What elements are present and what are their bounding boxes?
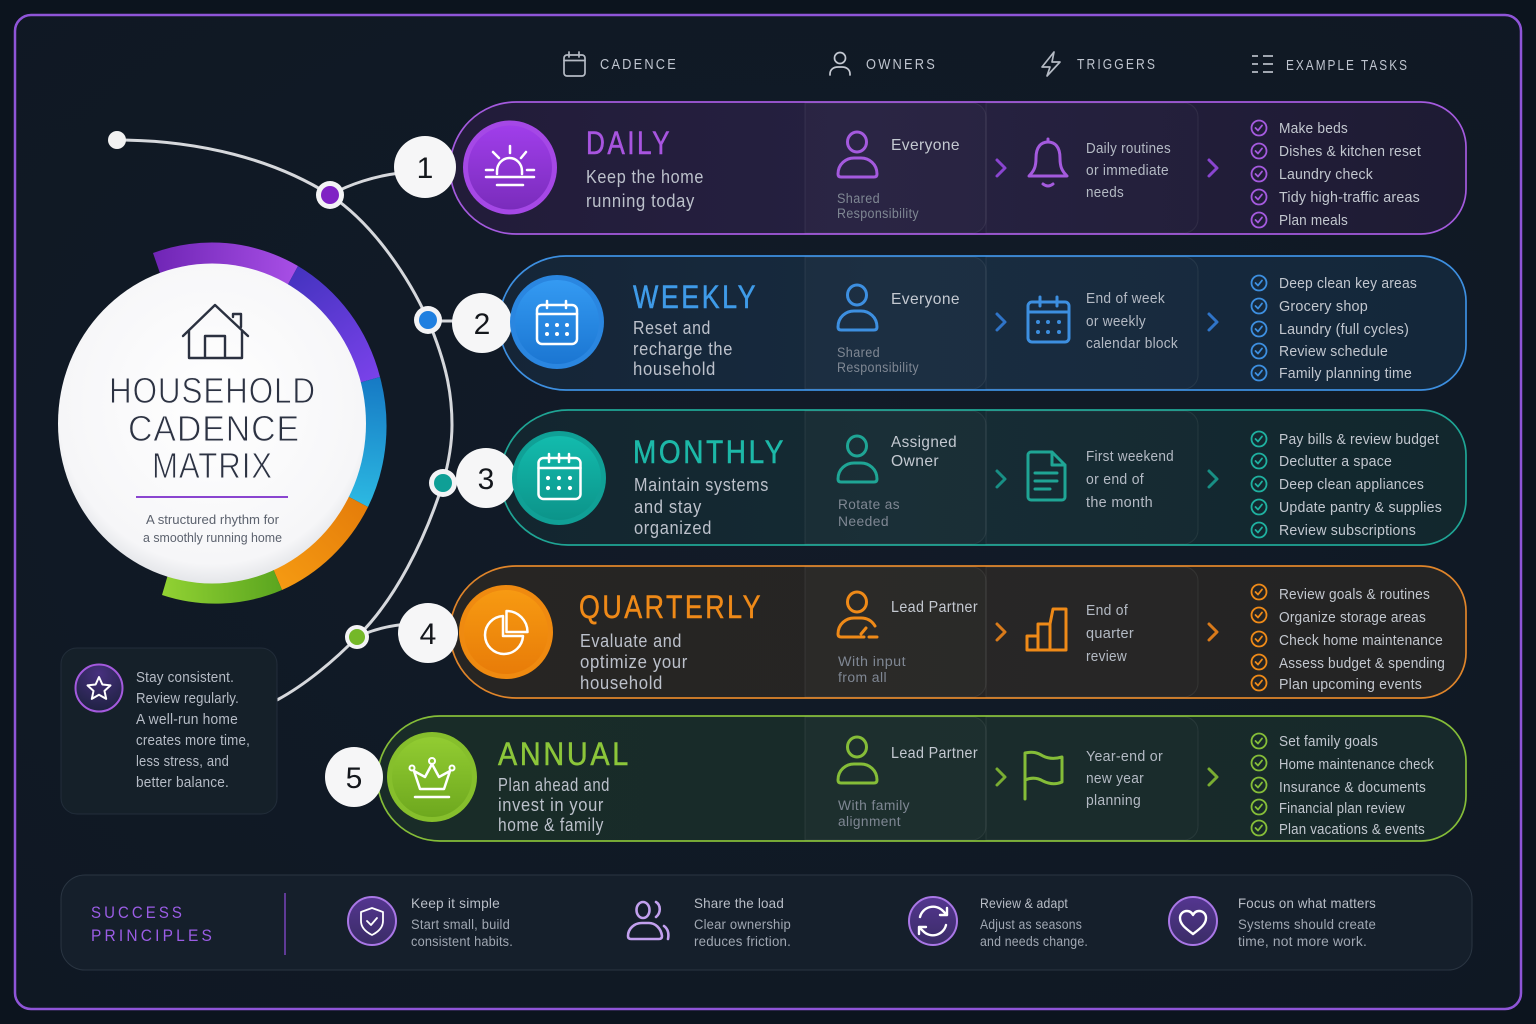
- owner: Needed: [838, 514, 889, 529]
- trigger: flag: planning: [1086, 793, 1141, 809]
- example tasks: Dishes & kitchen reset: [1279, 144, 1421, 160]
- description: [633, 318, 733, 379]
- header: cadence: CADENCE: [600, 57, 678, 73]
- title: ANNUAL: [498, 736, 631, 772]
- number badge 3: 3: [478, 463, 494, 496]
- example tasks: Insurance & documents: [1279, 780, 1426, 796]
- description: running today: [586, 191, 695, 211]
- title: WEEKLY: [633, 279, 758, 315]
- principle: share the load: [628, 895, 791, 949]
- timeline curve with nodes: [108, 131, 465, 700]
- example tasks: Laundry (full cycles): [1279, 322, 1409, 338]
- example tasks: Review subscriptions: [1279, 523, 1416, 539]
- principle: keep it simple: consistent habits.: [411, 934, 513, 949]
- example tasks: Deep clean appliances: [1279, 477, 1424, 493]
- trigger: bar chart: quarter: [1086, 626, 1134, 642]
- owner: Owner: [891, 453, 939, 470]
- trigger: flag: [1025, 749, 1163, 809]
- principle: focus on what matters: time, not more work.: [1238, 934, 1367, 949]
- principle: focus on what matters: Systems should create: [1238, 917, 1376, 932]
- owner: Everyone: [891, 291, 960, 308]
- description: household: [633, 359, 716, 379]
- example tasks: Tidy high-traffic areas: [1279, 190, 1420, 206]
- node 4: [345, 625, 369, 649]
- callout: stay consistent: [61, 648, 277, 814]
- owner: [838, 434, 957, 529]
- description: household: [580, 673, 663, 693]
- start dot: [108, 131, 126, 149]
- number badge 3: [456, 448, 516, 508]
- row panel: [378, 716, 1466, 841]
- description: [586, 167, 704, 211]
- owner: Everyone: [891, 137, 960, 154]
- owner: Lead Partner: [891, 745, 978, 762]
- trigger: bar chart: review: [1086, 649, 1127, 665]
- row panel: [500, 410, 1466, 545]
- node 2: [414, 306, 442, 334]
- owner: Shared: [837, 345, 880, 360]
- hub title: HOUSEHOLD: [109, 370, 316, 411]
- number badge 1: [394, 136, 456, 198]
- trigger cell: [986, 567, 1198, 697]
- example tasks: Family planning time: [1279, 366, 1412, 382]
- description: [498, 775, 610, 835]
- example tasks: Financial plan review: [1279, 801, 1405, 817]
- owner: [837, 132, 960, 221]
- bar panel: [61, 875, 1472, 970]
- number badge 4: [398, 603, 458, 663]
- owners cell: [805, 567, 986, 697]
- description: recharge the: [633, 339, 733, 359]
- header: cadence: [564, 52, 678, 76]
- trigger: bell: [1029, 139, 1171, 201]
- arrow: [997, 624, 1005, 640]
- example tasks: Make beds: [1279, 121, 1348, 137]
- trigger: flag: Year-end or: [1086, 749, 1163, 765]
- hub subtitle: A structured rhythm for: [146, 513, 279, 527]
- description: [634, 475, 769, 538]
- example tasks: Assess budget & spending: [1279, 656, 1445, 672]
- example tasks: Plan vacations & events: [1279, 822, 1425, 838]
- row 4: quarterly: [398, 566, 1466, 698]
- divider: [284, 893, 286, 955]
- example tasks: [1252, 432, 1442, 539]
- owner: [838, 737, 978, 829]
- connectors: [330, 173, 465, 637]
- trigger cell: [986, 103, 1198, 233]
- trigger: calendar: calendar block: [1086, 336, 1178, 352]
- principle: review and adapt: Adjust as seasons: [980, 917, 1082, 932]
- owner: Lead Partner: [891, 599, 978, 616]
- number badge 5: 5: [346, 762, 362, 795]
- trigger: bar chart: End of: [1086, 603, 1129, 619]
- header: triggers: TRIGGERS: [1077, 57, 1157, 73]
- owner: Shared: [837, 191, 880, 206]
- arrow: [1209, 624, 1217, 640]
- bar heading: PRINCIPLES: [91, 926, 215, 945]
- arrow: [1209, 471, 1217, 487]
- description: Plan ahead and: [498, 775, 610, 795]
- hub subtitle: [143, 513, 282, 545]
- owner: alignment: [838, 814, 901, 829]
- arrow: [997, 471, 1005, 487]
- arrow: [997, 160, 1005, 176]
- example tasks: [1252, 276, 1417, 382]
- bar heading: [91, 903, 215, 945]
- principle: focus on what matters: [1169, 895, 1376, 949]
- icon: crown badge: [387, 732, 477, 822]
- description: home & family: [498, 815, 604, 835]
- row 2: weekly: [452, 256, 1466, 390]
- owner: Rotate as: [838, 497, 900, 512]
- row panel: [499, 256, 1466, 390]
- description: Reset and: [633, 318, 711, 338]
- example tasks: Declutter a space: [1279, 454, 1392, 470]
- callout text: Review regularly.: [136, 691, 239, 707]
- hub title: [109, 370, 316, 486]
- principle: review and adapt: Review & adapt: [980, 895, 1068, 911]
- header: example tasks: EXAMPLE TASKS: [1286, 58, 1409, 74]
- principle: keep it simple: [348, 895, 513, 949]
- number badge 4: 4: [420, 618, 436, 651]
- example tasks: Set family goals: [1279, 734, 1378, 750]
- callout text: creates more time,: [136, 733, 250, 749]
- owner: With input: [838, 654, 906, 669]
- arrow: [1209, 160, 1217, 176]
- row 5: annual: [325, 716, 1466, 841]
- main curve: [117, 140, 452, 700]
- owner: [837, 285, 960, 375]
- principle: keep it simple: Start small, build: [411, 917, 510, 932]
- trigger: calendar: or weekly: [1086, 314, 1146, 330]
- owners cell: [805, 257, 986, 389]
- callout text: better balance.: [136, 775, 229, 791]
- trigger: bell: Daily routines: [1086, 141, 1171, 157]
- arrow: [997, 769, 1005, 785]
- description: Keep the home: [586, 167, 704, 187]
- segmented colour ring: [153, 242, 387, 604]
- success principles bar: [61, 875, 1472, 970]
- principle: share the load: reduces friction.: [694, 934, 791, 949]
- title: QUARTERLY: [579, 589, 763, 625]
- title: DAILY: [586, 125, 672, 161]
- icon: sunrise badge: [463, 120, 557, 214]
- owners cell: [805, 411, 986, 544]
- example tasks: Plan meals: [1279, 213, 1348, 229]
- row 1: daily: [394, 102, 1466, 234]
- trigger: document: [1028, 449, 1174, 511]
- trigger cell: [986, 257, 1198, 389]
- icon: calendar badge: [510, 275, 604, 369]
- description: optimize your: [580, 652, 688, 672]
- callout text: A well-run home: [136, 712, 238, 728]
- header: example tasks: [1252, 56, 1409, 74]
- principle: focus on what matters: Focus on what matters: [1238, 895, 1376, 911]
- principle: share the load: Share the load: [694, 895, 784, 911]
- title: MONTHLY: [633, 434, 786, 470]
- row panel: [450, 102, 1466, 234]
- icon: calendar badge: [512, 431, 606, 525]
- icon: star: [76, 664, 122, 712]
- trigger: bell: or immediate: [1086, 163, 1169, 179]
- example tasks: Review goals & routines: [1279, 587, 1430, 603]
- owner: Responsibility: [837, 360, 919, 375]
- example tasks: Plan upcoming events: [1279, 677, 1422, 693]
- owners cell: [805, 717, 986, 840]
- trigger: calendar: [1028, 291, 1178, 352]
- example tasks: [1252, 734, 1434, 838]
- arrow: [1209, 769, 1217, 785]
- hub title: MATRIX: [152, 445, 273, 486]
- trigger: document: or end of: [1086, 472, 1145, 488]
- description: [580, 631, 688, 693]
- owner: Responsibility: [837, 206, 919, 221]
- column headers: [564, 52, 1409, 76]
- example tasks: Organize storage areas: [1279, 610, 1426, 626]
- trigger: document: First weekend: [1086, 449, 1174, 465]
- trigger: bell: needs: [1086, 185, 1124, 201]
- row panel: [450, 566, 1466, 698]
- header: triggers: [1042, 52, 1157, 76]
- principle: review and adapt: and needs change.: [980, 934, 1088, 949]
- example tasks: [1252, 120, 1421, 229]
- trigger: document: the month: [1086, 495, 1153, 511]
- trigger cell: [986, 717, 1198, 840]
- owner: [838, 592, 978, 685]
- icon: pie chart badge: [459, 585, 553, 679]
- node 1: [316, 181, 344, 209]
- row 3: monthly: [456, 410, 1466, 545]
- trigger: bar chart: [1027, 603, 1134, 665]
- arrow: [997, 314, 1005, 330]
- example tasks: Pay bills & review budget: [1279, 432, 1439, 448]
- arrow: [1209, 314, 1217, 330]
- example tasks: Update pantry & supplies: [1279, 500, 1442, 516]
- description: invest in your: [498, 795, 604, 815]
- example tasks: Grocery shop: [1279, 299, 1368, 315]
- example tasks: [1252, 584, 1445, 693]
- number badge 2: [452, 293, 512, 353]
- description: and stay: [634, 497, 702, 517]
- hub title: CADENCE: [128, 408, 300, 449]
- number badge 1: 1: [417, 152, 433, 185]
- callout text: [136, 670, 250, 791]
- white disc: [58, 264, 366, 584]
- owner: With family: [838, 798, 910, 813]
- principle: keep it simple: Keep it simple: [411, 895, 500, 911]
- header: owners: [830, 52, 937, 75]
- header: owners: OWNERS: [866, 57, 937, 73]
- description: Evaluate and: [580, 631, 682, 651]
- hub underline: [136, 496, 288, 498]
- callout text: less stress, and: [136, 754, 229, 770]
- principle: review and adapt: [909, 895, 1088, 949]
- example tasks: Home maintenance check: [1279, 757, 1434, 773]
- owners cell: [805, 103, 986, 233]
- description: Maintain systems: [634, 475, 769, 495]
- number badge 2: 2: [474, 308, 490, 341]
- number badge 5: [325, 747, 383, 807]
- description: organized: [634, 518, 712, 538]
- example tasks: Deep clean key areas: [1279, 276, 1417, 292]
- principle: share the load: Clear ownership: [694, 917, 791, 932]
- trigger: flag: new year: [1086, 771, 1144, 787]
- bar heading: SUCCESS: [91, 903, 185, 922]
- node 3: [429, 469, 457, 497]
- owner: from all: [838, 670, 887, 685]
- callout text: Stay consistent.: [136, 670, 234, 686]
- hub subtitle: a smoothly running home: [143, 531, 282, 545]
- icon: house: [183, 305, 248, 358]
- example tasks: Check home maintenance: [1279, 633, 1443, 649]
- callout panel: [61, 648, 277, 814]
- central hub: household cadence matrix: [58, 242, 387, 604]
- trigger cell: [986, 411, 1198, 544]
- example tasks: Laundry check: [1279, 167, 1374, 183]
- example tasks: Review schedule: [1279, 344, 1388, 360]
- owner: Assigned: [891, 434, 957, 451]
- trigger: calendar: End of week: [1086, 291, 1165, 307]
